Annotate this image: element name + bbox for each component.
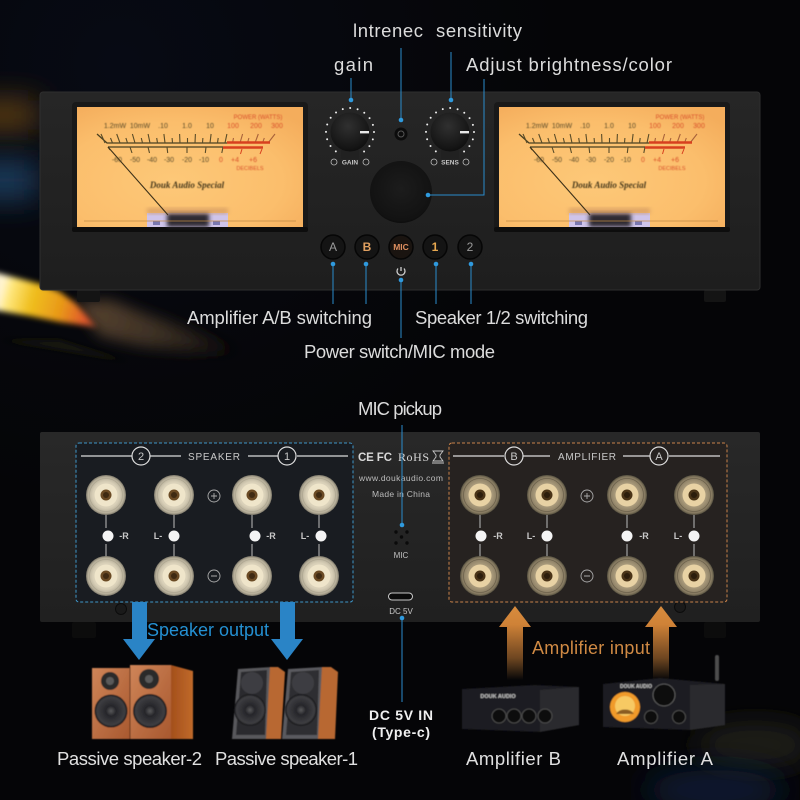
front buttons: B <box>363 240 372 254</box>
amplifier connectors <box>460 475 714 596</box>
meter scale text: 10mW <box>552 123 572 130</box>
screws <box>116 602 686 614</box>
amplifier header: AMPLIFIER <box>558 452 616 463</box>
front buttons <box>321 235 482 259</box>
speaker output label: Speaker output <box>147 620 269 640</box>
amplifier header: B <box>510 451 518 463</box>
meter scale text: 300 <box>693 123 705 130</box>
meter scale text <box>104 115 283 190</box>
meter scale text: -30 <box>586 157 596 164</box>
internal mic hole <box>394 128 408 140</box>
icon: amplifier A: DOUK AUDIO <box>620 684 652 690</box>
meter scale text: 100 <box>649 123 661 130</box>
amplifier connectors: L- <box>674 531 682 541</box>
meter scale text: -50 <box>552 157 562 164</box>
speaker header: 2 <box>138 451 144 463</box>
bottom labels <box>57 748 714 769</box>
meter scale text: 1.0 <box>182 123 192 130</box>
speaker connectors <box>86 475 339 596</box>
amplifier input label: Amplifier input <box>532 638 650 658</box>
panel: amplifier terminals <box>449 443 727 602</box>
meter scale text: .10 <box>158 123 168 130</box>
DC input label: DC 5V IN <box>369 707 433 723</box>
meter scale text: 10mW <box>130 123 150 130</box>
meter scale text: -50 <box>130 157 140 164</box>
speaker header <box>81 447 348 465</box>
bottom labels: Amplifier B <box>466 748 561 769</box>
callout lines: front <box>331 48 484 338</box>
speaker connectors: L- <box>301 531 309 541</box>
panel: left VU meter <box>72 102 308 232</box>
bottom labels: Passive speaker-1 <box>215 748 358 769</box>
arrows: amplifier input <box>499 606 677 680</box>
panel: front of device <box>40 92 760 302</box>
meter scale text: +6 <box>249 157 257 164</box>
panel: rear of device <box>40 432 760 638</box>
icon: MIC holes <box>394 530 409 545</box>
icon: amplifier B <box>462 685 579 732</box>
meter scale text: +6 <box>671 157 679 164</box>
speaker header: 1 <box>284 451 290 463</box>
meter scale text: -40 <box>147 157 157 164</box>
front labels: Amplifier A/B switching <box>187 307 372 328</box>
meter scale text: 100 <box>227 123 239 130</box>
sensitivity knob: SENS <box>441 160 460 166</box>
icon: power <box>397 267 405 275</box>
certification marks: RoHS <box>398 450 429 464</box>
front labels: gain <box>334 54 373 75</box>
meter scale text: -10 <box>621 157 631 164</box>
speaker header: SPEAKER <box>188 452 240 463</box>
front buttons: MIC <box>393 242 409 252</box>
icon: grey speakers <box>232 667 338 739</box>
meter scale text: +4 <box>653 157 661 164</box>
meter scale text: 10 <box>628 123 636 130</box>
icon: amplifier B: DOUK AUDIO <box>480 694 516 700</box>
DC 5V label: DC 5V <box>389 607 413 616</box>
DC input label <box>369 707 433 740</box>
speaker connectors: -R <box>119 531 129 541</box>
panel: right VU meter <box>494 102 730 232</box>
front labels: lntrenec <box>353 20 423 41</box>
front labels: Speaker 1/2 switching <box>415 307 588 328</box>
feet: rear <box>72 622 726 638</box>
meter scale text: DECIBELS <box>236 166 264 172</box>
front buttons: 2 <box>467 240 474 254</box>
bottom labels: Amplifier A <box>617 748 714 769</box>
meter scale text: Douk Audio Special <box>571 180 647 190</box>
rear casing <box>40 432 760 622</box>
icon: USB-C port <box>388 593 412 600</box>
meter scale text: DECIBELS <box>658 166 686 172</box>
meter scale text: 0 <box>219 157 223 164</box>
certification marks: CE FC <box>358 452 392 464</box>
speaker connectors: L- <box>154 531 162 541</box>
front labels: Adjust brightness/color <box>466 54 672 75</box>
icon: amplifier A <box>603 655 725 730</box>
gain knob: GAIN <box>342 160 358 166</box>
front labels: sensitivity <box>436 20 523 41</box>
rear centre text: www.doukaudio.com <box>358 473 443 483</box>
meter scale text: 200 <box>672 123 684 130</box>
icon: wooden speakers <box>92 665 193 739</box>
front buttons: 1 <box>432 240 439 254</box>
rear centre text: Made in China <box>372 489 430 499</box>
meter scale text: -10 <box>199 157 209 164</box>
meter scale text: -30 <box>164 157 174 164</box>
amplifier header: A <box>655 451 663 463</box>
front casing <box>40 92 760 290</box>
meter scale text: 1.2mW <box>526 123 548 130</box>
meter scale text <box>526 115 705 190</box>
brightness knob <box>370 161 432 223</box>
panel: speaker terminals <box>76 443 353 602</box>
meter scale text: 0 <box>641 157 645 164</box>
DC input label: (Type-c) <box>372 724 430 740</box>
meter scale text: POWER (WATTS) <box>234 115 282 121</box>
meter scale text: -40 <box>569 157 579 164</box>
speaker connectors: -R <box>266 531 276 541</box>
callout lines: rear <box>400 425 404 702</box>
meter scale text: -20 <box>182 157 192 164</box>
gain knob <box>326 108 374 166</box>
sensitivity knob <box>426 108 474 166</box>
amplifier connectors: L- <box>527 531 535 541</box>
front labels <box>187 20 672 362</box>
meter scale text: 300 <box>271 123 283 130</box>
meter scale text: 1.0 <box>604 123 614 130</box>
certification marks <box>358 450 444 464</box>
meter scale text: 10 <box>206 123 214 130</box>
meter scale text: 1.2mW <box>104 123 126 130</box>
meter scale text: 200 <box>250 123 262 130</box>
amplifier header <box>453 447 720 465</box>
front labels: Power switch/MIC mode <box>304 341 495 362</box>
rear centre text <box>358 473 443 499</box>
front buttons: A <box>329 240 337 254</box>
meter scale text: Douk Audio Special <box>149 180 225 190</box>
feet: front <box>77 290 726 302</box>
meter scale text: POWER (WATTS) <box>656 115 704 121</box>
meter scale text: +4 <box>231 157 239 164</box>
MIC pickup label: MIC pickup <box>358 398 442 419</box>
meter scale text: -60 <box>534 157 544 164</box>
MIC label: MIC <box>394 551 409 560</box>
bottom labels: Passive speaker-2 <box>57 748 202 769</box>
amplifier connectors: -R <box>493 531 503 541</box>
meter scale text: -20 <box>604 157 614 164</box>
amplifier connectors: -R <box>639 531 649 541</box>
meter scale text: .10 <box>580 123 590 130</box>
meter scale text: -60 <box>112 157 122 164</box>
arrows: speaker output <box>123 602 303 660</box>
